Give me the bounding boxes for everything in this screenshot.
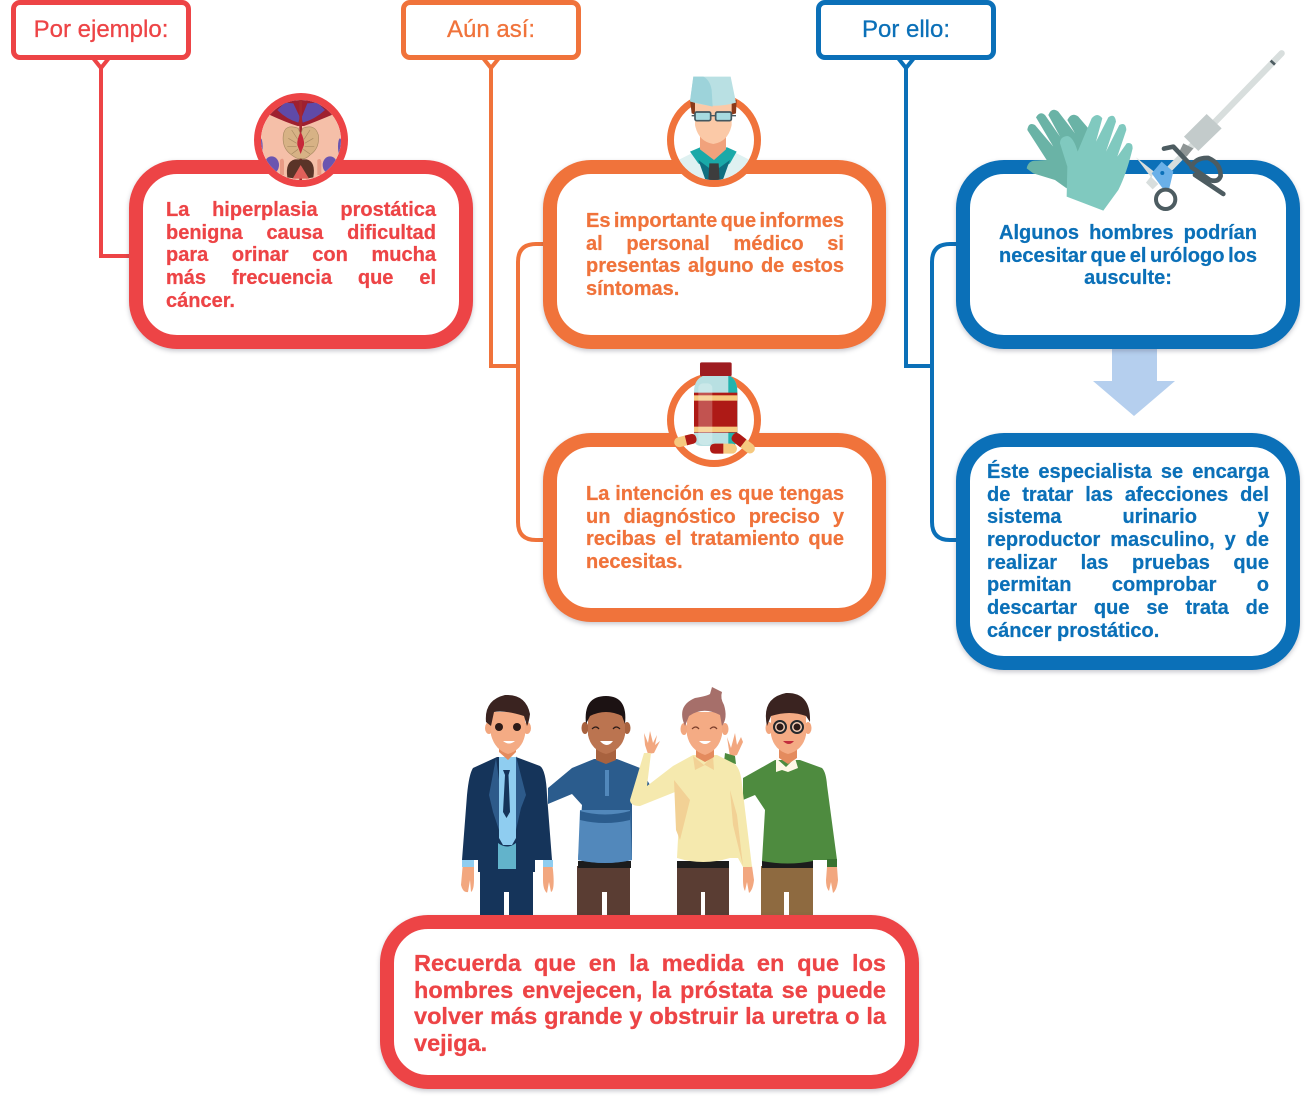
man in green sweater <box>724 693 838 915</box>
text: recuerda: Recuerda que en la medida en que los <box>414 950 886 976</box>
text: informar síntomas: presentas alguno de estos <box>586 255 844 277</box>
text: diagnóstico: un diagnóstico preciso y <box>586 506 844 528</box>
text: urólogo <box>999 222 1257 289</box>
man in suit <box>461 695 554 915</box>
icon: pill bottle <box>670 362 758 464</box>
connector: orange <box>483 58 545 540</box>
text: recuerda: vejiga. <box>414 1030 487 1056</box>
text: especialista <box>987 460 1270 642</box>
text: diagnóstico: recibas el tratamiento que <box>586 528 844 550</box>
text: recuerda: hombres envejecen, la próstata se puede <box>414 977 886 1003</box>
illustration: four men <box>461 687 838 915</box>
text: especialista: de tratar las afecciones del <box>987 484 1269 506</box>
text: informar síntomas: al personal médico si <box>586 233 844 255</box>
icon: prostate <box>258 96 344 184</box>
panel: informar síntomas <box>543 160 886 349</box>
text: diagnóstico: La intención es que tengas <box>586 483 844 505</box>
connector: blue <box>898 58 958 540</box>
icons above panels <box>254 50 1285 467</box>
tab: Aún así: Aún así: <box>447 16 535 43</box>
text: recuerda: volver más grande y obstruir la uretra o la <box>414 1003 886 1029</box>
text: hiperplasia: La hiperplasia prostática <box>166 199 436 221</box>
man in yellow shirt <box>630 687 754 915</box>
text: hiperplasia: benigna causa dificultad <box>166 222 436 244</box>
panel: hiperplasia <box>129 160 473 349</box>
tab: Por ejemplo: Por ejemplo: <box>34 16 168 43</box>
text: especialista: permitan comprobar o <box>987 574 1269 596</box>
text: urólogo: necesitar que el urólogo los <box>999 245 1257 267</box>
panel: urólogo <box>956 160 1300 349</box>
tab: Por ello: Por ello: <box>862 16 950 43</box>
text: especialista: reproductor masculino, y de <box>987 529 1269 551</box>
text: diagnóstico: necesitas. <box>586 551 683 573</box>
connector: red <box>93 58 131 256</box>
text: especialista: cáncer prostático. <box>987 620 1159 642</box>
tab: Por ejemplo <box>11 0 191 60</box>
text: recuerda <box>414 950 886 1056</box>
text: hiperplasia: para orinar con mucha <box>166 244 436 266</box>
arrow: down <box>1093 348 1175 416</box>
panel: recuerda <box>380 915 919 1089</box>
text: urólogo: Algunos hombres podrían <box>999 222 1257 244</box>
tab: Por ello <box>816 0 996 60</box>
icon: doctor <box>670 77 758 187</box>
text: hiperplasia: más frecuencia que el <box>166 267 436 289</box>
text: hiperplasia: cáncer. <box>166 290 235 312</box>
text: especialista: sistema urinario y <box>987 506 1269 528</box>
tab: Aún así <box>401 0 581 60</box>
text: diagnóstico <box>586 483 844 573</box>
text: especialista: realizar las pruebas que <box>987 552 1269 574</box>
text: hiperplasia <box>166 199 436 312</box>
panel: diagnóstico <box>543 433 886 622</box>
text: informar síntomas: Es importante que informes <box>586 210 844 232</box>
icon: gloves <box>1027 110 1133 211</box>
text: especialista: descartar que se trata de <box>987 597 1269 619</box>
text: urólogo: ausculte: <box>1084 267 1172 289</box>
panel: especialista <box>956 433 1300 670</box>
text: especialista: Éste especialista se encarga <box>987 461 1269 483</box>
text: informar síntomas: síntomas. <box>586 278 679 300</box>
text: informar síntomas <box>586 210 844 300</box>
icon: laparoscopic instrument <box>1136 53 1282 209</box>
man in blue sweater <box>548 696 650 915</box>
